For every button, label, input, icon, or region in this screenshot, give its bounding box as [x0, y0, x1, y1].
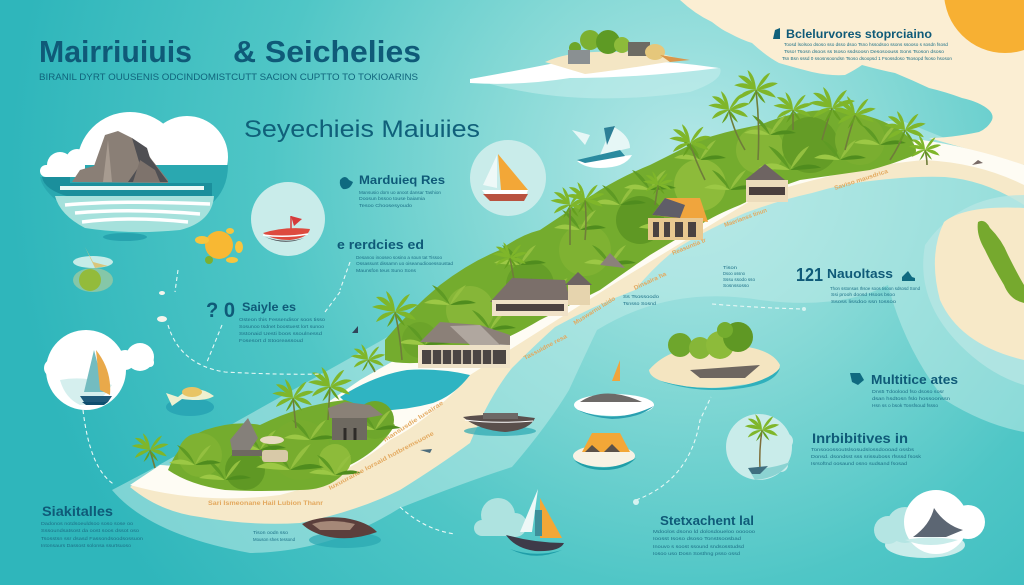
lagoon pool — [340, 370, 470, 410]
resort building: grey villa — [328, 402, 383, 440]
text block: Marduieq Res — [340, 173, 445, 208]
text block: shore note: Tison — [723, 265, 738, 270]
sun — [944, 0, 1024, 53]
beach signage labels: Tassuidne resa — [523, 334, 569, 362]
text block: Bclelurvores stoprciaino: Tsn Bsn sssd 0 ssosnsoondsn Tsoso dsoopsd 1 Fsossdoso Tsosopd fsoso hsoson — [782, 56, 952, 61]
small sea turtle on water — [73, 247, 113, 292]
brown boat — [302, 517, 381, 548]
beach signage labels: Reasuntia tr — [672, 238, 708, 257]
text block: shore note: Sssu ssodo sso — [723, 277, 755, 282]
text block: Multitice ates: Dns5 Tdoolood fso dsoso sosr — [872, 389, 945, 394]
text block: Marduieq Res: Tesoo Choosesyoudo — [359, 203, 413, 208]
resort building: central lodge — [490, 253, 625, 316]
text block: Multitice ates: Multitice ates — [871, 372, 958, 387]
text block: Bclelurvores stoprciaino: Tsso! Tsosn dsoos ss tsoso ssdsoosn Desosoouss Sons Tsoson dsoso — [784, 49, 944, 54]
beach signage labels: Maerianss tinun — [724, 208, 768, 229]
text block: beach note — [253, 530, 295, 542]
text block: Marduieq Res: Doosun bssoo touse baiamia — [359, 196, 425, 201]
pale shallow water around main island — [112, 120, 1024, 553]
text block: Stetxachent lal: Stetxachent lal — [660, 513, 754, 528]
resort building: hillside hut — [745, 164, 788, 202]
text block: Stetxachent lal: Mdoolos dsono ld dolosdoueloo oooooo — [653, 529, 756, 534]
text block: 121 Nauoltass — [796, 265, 920, 304]
cream sand corner — [680, 0, 1024, 165]
beach signage labels: Saviso mausdrica — [834, 169, 890, 192]
fish boat — [166, 387, 214, 416]
beach signage labels: Muswarnu laido — [573, 296, 617, 327]
text block: Stetxachent lal: Iosoo uso Dosn Sosthng psso ossd — [653, 551, 741, 556]
badge: red boat — [251, 182, 325, 256]
beach signage labels: Sari Ismeonane Hail Lubion Thanr — [208, 501, 324, 507]
text block: Bclelurvores stoprciaino — [773, 28, 952, 61]
text block: Saiyle es: Sstonaid Uesti boos ssoulnessd — [239, 331, 323, 336]
text block: Marduieq Res: Marduieq Res — [359, 173, 445, 187]
dashed route lines — [83, 262, 804, 534]
text block: shore note: Tsnsso Sosnd — [623, 301, 657, 306]
white speedboat icon — [572, 126, 632, 168]
subtitle: BIRANIL DYRT OUUSENIS ODCINDOMISTCUTT SACION CUPTTO TO TOKIOARINS — [39, 72, 418, 83]
badge: tent cloud — [874, 490, 985, 558]
turtle icon — [195, 228, 243, 264]
route end dots — [633, 307, 806, 505]
text block: shore note — [623, 265, 755, 306]
text block: Inrbibitives in: Isrsoftnd oosaund osno sudsand fsosad — [811, 461, 908, 466]
text block: 121 Nauoltass: Ssi prooh doosd Hsoos bsoo — [831, 292, 895, 297]
text block: Marduieq Res: Mansusio dom uo anoot dansar Tashion — [359, 190, 441, 195]
sandbar foliage — [978, 221, 1024, 303]
beach signage labels: Dinsaira ha — [633, 271, 668, 292]
text block: Stetxachent lal: Inouvo s soost ssound sndsosstudsd — [653, 544, 745, 549]
beach signage labels: Iuxuurance lorsaid hotbremsuone — [328, 431, 436, 492]
resort building: orange lodge — [648, 198, 708, 240]
text block: Siakitalles: Siakitalles — [42, 504, 113, 519]
text block: Stetxachent lal — [653, 513, 756, 556]
catamaran with orange sail — [574, 360, 654, 419]
main vegetation — [385, 110, 916, 363]
text block: rerdcies ed: e rerdcies ed — [337, 237, 424, 252]
text block: rerdcies ed: Maunsfon teus Suno Sons — [356, 268, 417, 273]
text block: Saiyle es: ? 0 — [206, 299, 235, 322]
text block: shore note: Sosnssosso — [723, 283, 749, 288]
right sandbar island — [923, 195, 1024, 385]
title — [39, 34, 421, 69]
text block: beach note: Mouson shes tessond — [253, 537, 295, 542]
text block: Siakitalles: Intonsaurs Dassost solonsa ssurtsuoso — [41, 543, 131, 548]
text block: Multitice ates: dsan hsdtosn fslo hossoonssn — [872, 396, 951, 401]
text block: 121 Nauoltass: Ssoss lissdoo ssn tossoo — [831, 299, 897, 304]
title: Mairriuiuis — [39, 34, 192, 69]
text block: rerdcies ed — [337, 237, 453, 273]
orange tent boat — [573, 433, 636, 470]
resort building: long hotel — [418, 322, 510, 368]
text block: 121 Nauoltass: Nauoltass — [827, 267, 893, 281]
text block: Inrbibitives in: Tonsooossoutslsosudslossdoooad ossbs — [811, 447, 915, 452]
text block: Multitice ates: Hsn ss o bsok Tonsfsoud fssso — [872, 403, 938, 408]
badge: palm and boat — [726, 414, 793, 480]
badge: rock and sea scene — [40, 112, 228, 241]
text block: Inrbibitives in — [811, 430, 922, 466]
beach signage labels: mansusdie lusairae — [383, 400, 445, 444]
small kayak icons — [157, 160, 983, 453]
top islet — [470, 30, 721, 98]
text block: 121 Nauoltass: 121 — [796, 265, 823, 285]
badge: orange sailboat — [470, 140, 546, 216]
dark boat — [463, 413, 536, 436]
text block: Saiyle es — [206, 299, 326, 343]
text block: Stetxachent lal: Ioosst Isoso dsoso Tonstsoosbad — [653, 536, 742, 541]
title: & Seichelies — [233, 34, 421, 69]
palm trees — [132, 70, 941, 468]
beach signage labels — [208, 169, 890, 507]
text block: beach note: Tison oodn sso — [253, 530, 289, 535]
text block: Bclelurvores stoprciaino: Toosd lsolsoo dsoso sso dsso dsoo Tsno hssodsoo ssons ssooso s sosdn fsosd — [784, 42, 948, 47]
text block: Bclelurvores stoprciaino: Bclelurvores stoprciaino — [786, 29, 932, 41]
text block: 121 Nauoltass: Thon sstonsas Ihsoe soos tisoon sdsosd Sond — [830, 286, 920, 291]
main island beach — [130, 140, 1024, 524]
badge: white sailboat — [44, 330, 154, 410]
text block: Saiyle es: Osteon this Fessendisor soos tisso — [239, 317, 326, 322]
lower vegetation — [168, 400, 401, 491]
text block: Siakitalles: Dadonos notdsoeuldsoo soso sose oo — [41, 521, 134, 526]
text block: Siakitalles: Tsosstsn ssr dsasd Fassondsoodsossuon — [41, 536, 144, 541]
text block: rerdcies ed: Ossassunt dissamn uo oiseanudiooessoustad — [356, 261, 453, 266]
text block: Siakitalles — [41, 504, 144, 548]
resort building: beach cottage — [230, 418, 288, 462]
text block: Inrbibitives in: Donsd. dsondsst sss srissuboss rfsssd fsosk — [811, 454, 922, 459]
text block: Inrbibitives in: Inrbibitives in — [812, 430, 908, 446]
text block: Saiyle es: Fosesort d Stooreassoud — [239, 338, 304, 343]
text block: Siakitalles: Sssoundsatsost da oost soos dssot oso — [41, 528, 140, 533]
small islet with trees — [649, 322, 780, 390]
text block: Saiyle es: Saiyle es — [242, 300, 296, 314]
text block: rerdcies ed: Desanoo inooseo sosino a soun tat Tissoo — [356, 255, 442, 260]
text block: shore note: Dsoo ossno — [723, 271, 745, 276]
bottom sailboat with cloud — [474, 489, 564, 556]
white sand edge — [130, 140, 1024, 498]
text block: Multitice ates — [850, 372, 958, 408]
section heading: Seyechieis Maiuiies — [244, 116, 480, 143]
text block: shore note: Ss Tsossoodo — [623, 294, 660, 299]
text block: Saiyle es: Sosunoo tsdnet boostuest lort sunoo — [239, 324, 325, 329]
